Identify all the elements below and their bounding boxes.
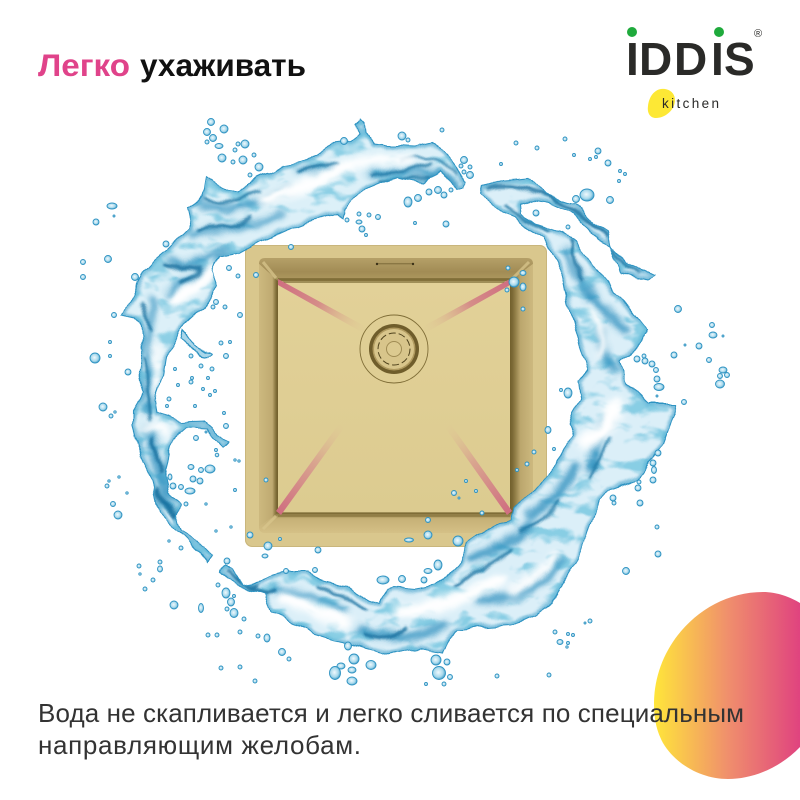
title pink word: Легко (38, 47, 130, 83)
logo green dots (627, 27, 724, 37)
logo yellow spot (648, 89, 675, 118)
sink drain (360, 315, 428, 383)
body text (38, 698, 744, 760)
sink right wall (510, 264, 533, 527)
pink groove top right (422, 279, 510, 333)
sink (245, 245, 547, 547)
body line 2: направляющим желобам. (38, 730, 361, 760)
logo wordmark: IDDIS (626, 33, 755, 85)
sink corner creases (263, 262, 529, 529)
sink flange (245, 245, 547, 547)
title black word: ухаживать (140, 47, 306, 83)
sink floor (278, 281, 510, 513)
water stream upper left (120, 118, 466, 564)
logo: IDDIS kitchen (626, 27, 762, 118)
decorative gradient blob (654, 592, 800, 779)
pink groove bottom right (417, 385, 512, 515)
pink groove bottom left (276, 385, 373, 515)
water splash ring (80, 100, 730, 686)
water hook near sink (181, 331, 213, 357)
registered mark: ® (754, 28, 762, 40)
water stream lower and right (210, 170, 690, 660)
body line 1: Вода не скапливается и легко сливается по специальным (38, 698, 744, 728)
pink groove top left (278, 279, 370, 335)
title (38, 47, 306, 83)
water droplets (80, 118, 730, 686)
sink left wall (259, 264, 278, 527)
sink bottom wall (259, 513, 533, 533)
sink floor edge lines (277, 282, 511, 513)
sink top wall (259, 258, 533, 281)
water streams (100, 100, 690, 660)
logo kitchen word: kitchen (662, 96, 719, 111)
overflow slot (376, 263, 414, 265)
